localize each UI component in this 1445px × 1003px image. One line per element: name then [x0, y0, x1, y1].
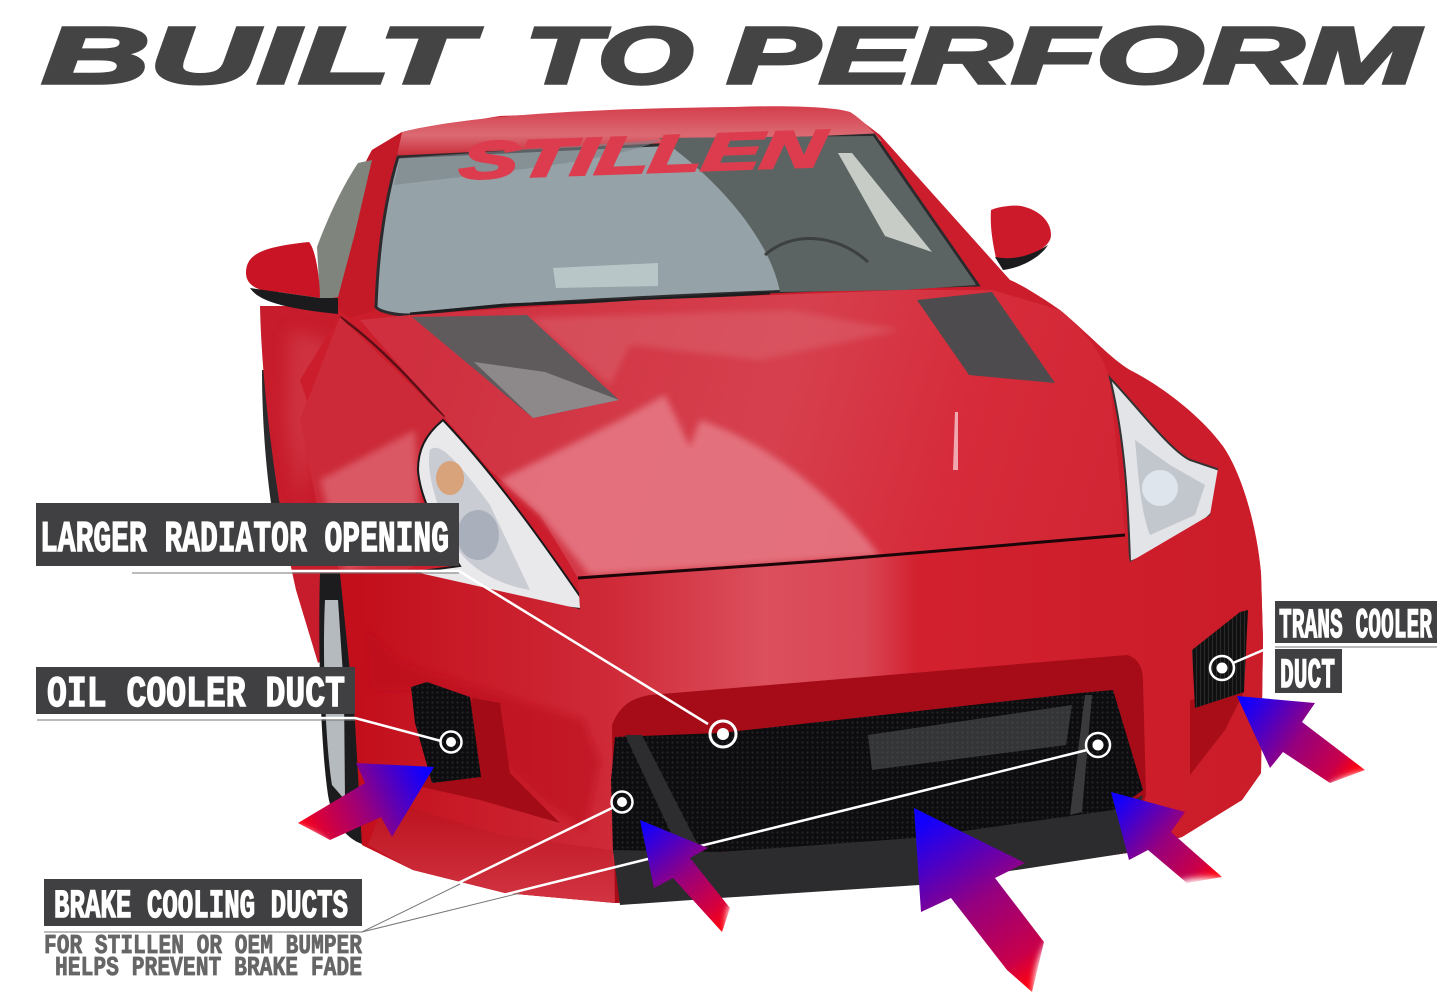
marker: trans cooler — [1210, 656, 1234, 680]
label: oil cooler duct: OIL COOLER DUCT — [47, 670, 345, 720]
upper bumper — [340, 445, 1263, 903]
label: duct: DUCT — [1280, 652, 1335, 700]
right mirror base — [995, 245, 1048, 270]
arrow: left brake — [640, 820, 730, 932]
left mirror base — [250, 288, 338, 314]
windscreen dark reflection — [659, 136, 976, 292]
label: brake cooling ducts — [44, 879, 362, 930]
lower left bumper — [368, 800, 615, 903]
label: brake cooling ducts: BRAKE COOLING DUCTS — [54, 885, 348, 930]
right duct slats — [1192, 610, 1248, 708]
left mirror — [246, 242, 320, 298]
stillen windshield banner: STILLEN — [456, 120, 830, 191]
front left wheel — [319, 573, 372, 844]
left headlight — [415, 420, 586, 609]
title: built to perform: TO — [525, 11, 693, 100]
rear-view seat highlight — [553, 263, 658, 288]
right headlight housing — [1135, 440, 1205, 535]
steering wheel — [765, 239, 868, 262]
marker: oil cooler — [440, 732, 462, 752]
right hood scoop — [917, 292, 1055, 383]
arrow tail fades — [283, 766, 1381, 1003]
title: built to perform: PERFORM — [727, 11, 1423, 100]
marker: radiator — [710, 721, 736, 747]
leader lines — [37, 571, 1437, 930]
body silhouette — [300, 107, 1263, 903]
marker: left brake duct — [612, 792, 632, 812]
right grille support — [1070, 695, 1092, 815]
left scoop lower glare — [474, 362, 619, 418]
right headlight — [1110, 378, 1220, 562]
hood — [360, 290, 1125, 578]
left grille support — [625, 735, 698, 848]
wheel rim — [324, 600, 345, 800]
marker: right brake duct — [1086, 733, 1110, 757]
left duct recess — [422, 698, 560, 823]
left duct mesh — [411, 682, 481, 783]
underline shadows — [37, 573, 1437, 932]
brake note line one: FOR STILLEN OR OEM BUMPER — [44, 932, 363, 962]
hood centre streak — [953, 412, 958, 470]
arrow: right duct — [1237, 696, 1365, 783]
title: built to perform — [42, 11, 1423, 100]
hood upper reflection — [530, 310, 900, 385]
roof — [396, 106, 882, 160]
rear left wheel — [262, 370, 285, 510]
wiper blades — [410, 293, 770, 314]
right duct recess — [1190, 690, 1245, 775]
left indicator — [436, 461, 464, 495]
left side reflection — [285, 330, 330, 500]
windscreen — [376, 135, 978, 315]
side window — [317, 160, 372, 300]
bumper crease shadow — [367, 630, 600, 830]
brake note line two: HELPS PREVENT BRAKE FADE — [55, 954, 362, 984]
hood seam — [578, 535, 1125, 578]
label: duct — [1275, 649, 1342, 700]
car side panel — [260, 306, 445, 663]
left fender glare — [320, 430, 420, 570]
hood shut line — [340, 317, 444, 417]
label: larger radiator opening: LARGER RADIATOR OPENING — [40, 515, 449, 565]
arrow: center grille — [914, 808, 1044, 992]
right headlight lens — [1142, 470, 1178, 506]
hood highlight — [500, 395, 880, 575]
label: larger radiator opening — [36, 503, 459, 566]
right mirror — [991, 206, 1051, 259]
front splitter — [613, 795, 1143, 905]
engine cooler through mesh — [868, 705, 1072, 770]
left fender — [300, 317, 444, 600]
left hood scoop — [412, 315, 619, 418]
left headlight housing — [429, 448, 530, 590]
left a-pillar — [320, 132, 402, 318]
grille surround — [612, 655, 1146, 903]
arrow: left duct — [298, 763, 434, 840]
windscreen reflection — [838, 153, 932, 252]
arrow: right brake — [1111, 792, 1222, 883]
windscreen top tint — [394, 140, 660, 185]
left headlight lens — [457, 510, 499, 560]
main grille mesh — [611, 690, 1143, 853]
title: built to perform: BUILT — [42, 11, 481, 100]
car photo illustration — [246, 106, 1263, 905]
